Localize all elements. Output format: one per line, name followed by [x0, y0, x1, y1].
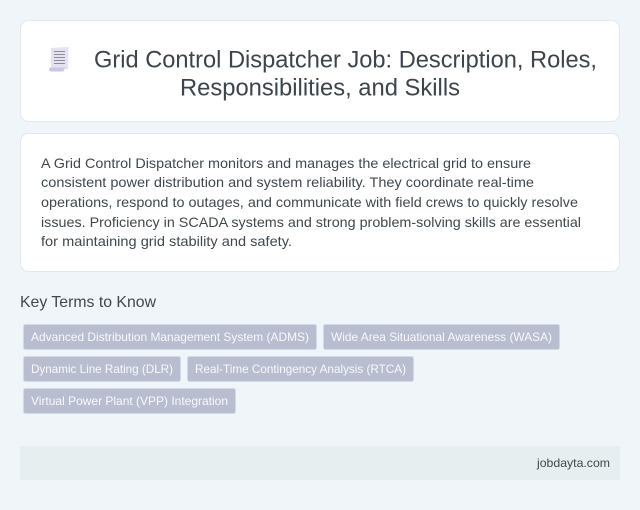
heading: key terms: Key Terms to Know	[20, 294, 156, 311]
tag: RTCA: Real-Time Contingency Analysis (RTCA)	[195, 362, 406, 376]
key term tags	[24, 324, 560, 414]
tag: RTCA	[188, 356, 414, 382]
tag: VPP: Virtual Power Plant (VPP) Integration	[31, 394, 228, 408]
description text: issues. Proficiency in SCADA systems and strong problem-solving skills are essential	[41, 214, 581, 230]
icon: document scroll	[49, 47, 68, 72]
description text: A Grid Control Dispatcher monitors and manages the electrical grid to ensure	[41, 155, 531, 171]
title: Grid Control Dispatcher Job: Description, Roles,	[94, 46, 597, 74]
tag: DLR	[24, 356, 180, 382]
panel: title card	[20, 20, 620, 122]
footer text: jobdayta.com	[536, 456, 610, 470]
title	[94, 46, 597, 102]
tag: ADMS: Advanced Distribution Management System (ADMS)	[31, 330, 309, 344]
tag: WASA: Wide Area Situational Awareness (WASA)	[331, 330, 552, 344]
description text: operations, respond to outages, and communicate with field crews to quickly resolve	[41, 194, 578, 210]
description text: consistent power distribution and system reliability. They coordinate real-time	[41, 174, 534, 190]
title: Responsibilities, and Skills	[180, 74, 460, 102]
description text	[41, 155, 581, 249]
tag: WASA	[324, 324, 560, 350]
footer bar	[20, 446, 620, 480]
tag: VPP	[24, 388, 236, 414]
tag: ADMS	[24, 324, 316, 350]
description text: for maintaining grid stability and safety.	[41, 233, 292, 249]
tag: DLR: Dynamic Line Rating (DLR)	[31, 362, 173, 376]
panel: description card	[20, 134, 620, 272]
